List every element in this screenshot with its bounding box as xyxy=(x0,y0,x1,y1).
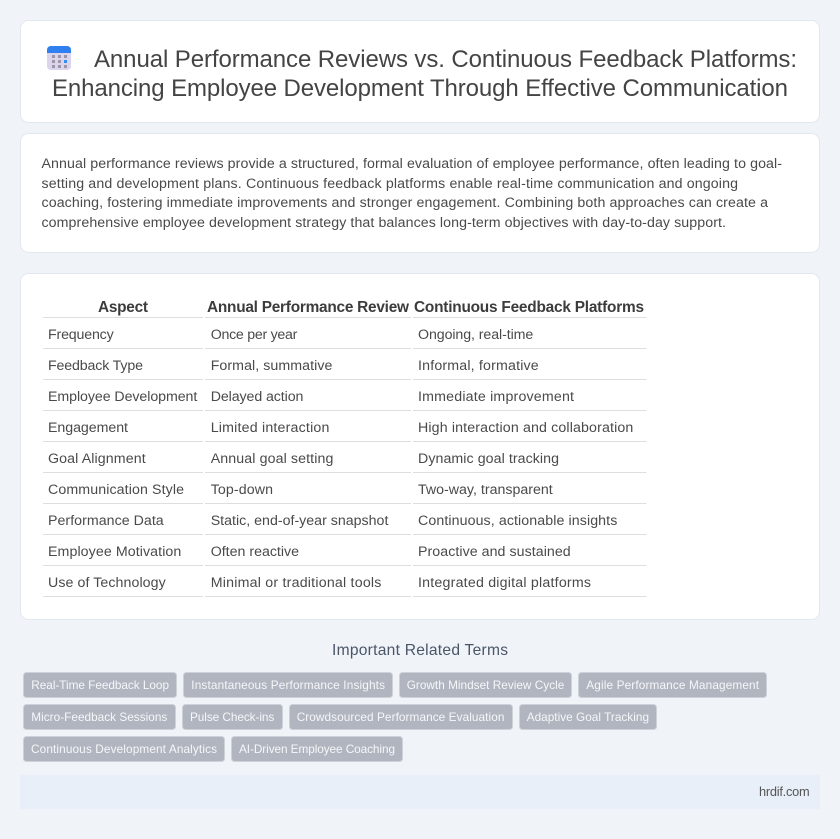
row: feedback type: Formal, summative xyxy=(211,358,333,374)
row: engagement: Engagement xyxy=(48,420,128,436)
row: employee development: Delayed action xyxy=(211,389,303,405)
tag xyxy=(232,736,402,762)
tag xyxy=(182,704,282,730)
tag xyxy=(24,736,224,762)
tag: Pulse Check-ins xyxy=(190,710,274,724)
row: goal alignment: Dynamic goal tracking xyxy=(418,451,559,467)
panel: comparison table xyxy=(20,274,820,620)
row: goal alignment: Goal Alignment xyxy=(48,451,146,467)
row: use of technology xyxy=(48,575,591,591)
row: performance data: Continuous, actionable insights xyxy=(418,513,617,529)
row: use of technology: Minimal or traditional tools xyxy=(211,575,381,591)
row: frequency: Once per year xyxy=(211,327,298,343)
tag: Micro-Feedback Sessions xyxy=(31,710,167,724)
row: feedback type xyxy=(48,358,539,374)
row: performance data: Static, end-of-year snapshot xyxy=(211,513,388,529)
row: engagement: Limited interaction xyxy=(211,420,329,436)
tag list xyxy=(24,672,766,762)
tag xyxy=(520,704,656,730)
row: employee development xyxy=(48,389,574,405)
tag: Instantaneous Performance Insights xyxy=(191,678,385,692)
row: goal alignment xyxy=(48,451,559,467)
tag: Continuous Development Analytics xyxy=(31,742,217,756)
row: employee motivation xyxy=(48,544,571,560)
row: employee development: Immediate improvement xyxy=(418,389,574,405)
row: communication style: Top-down xyxy=(211,482,273,498)
tag: AI-Driven Employee Coaching xyxy=(239,742,395,756)
tag: Agile Performance Management xyxy=(586,678,760,692)
tag xyxy=(578,672,766,698)
tag: Crowdsourced Performance Evaluation xyxy=(297,710,504,724)
tag xyxy=(24,672,176,698)
row: performance data xyxy=(48,513,617,529)
tag: Adaptive Goal Tracking xyxy=(527,710,649,724)
intro paragraph: comprehensive employee development strategy that balances long-term objectives with day-to-day support. xyxy=(42,215,726,231)
row: goal alignment: Annual goal setting xyxy=(211,451,333,467)
row: engagement xyxy=(48,420,633,436)
row: use of technology: Use of Technology xyxy=(48,575,167,591)
title: Annual Performance Reviews vs. Continuous Feedback Platforms: xyxy=(94,46,797,73)
intro paragraph xyxy=(42,156,782,231)
tag xyxy=(400,672,572,698)
title xyxy=(52,46,797,102)
row: frequency xyxy=(48,327,533,343)
row: employee motivation: Often reactive xyxy=(211,544,299,560)
row: communication style xyxy=(48,482,553,498)
table header: Continuous Feedback Platforms xyxy=(414,299,644,316)
row: use of technology: Integrated digital platforms xyxy=(418,575,591,591)
intro paragraph: setting and development plans. Continuous feedback platforms enable real-time communication and ongoing xyxy=(42,176,738,192)
tag: Growth Mindset Review Cycle xyxy=(407,678,565,692)
intro paragraph: coaching, fostering immediate improvements and stronger engagement. Combining both approaches can create a xyxy=(42,195,768,211)
heading: important related terms: Important Related Terms xyxy=(332,642,508,659)
footer source text: hrdif.com xyxy=(759,784,810,799)
row: communication style: Communication Style xyxy=(48,482,184,498)
icon: calendar xyxy=(47,46,71,70)
panel: introduction xyxy=(20,134,820,252)
row: employee motivation: Employee Motivation xyxy=(48,544,181,560)
row: frequency: Frequency xyxy=(48,327,115,343)
row: feedback type: Feedback Type xyxy=(48,358,143,374)
row: frequency: Ongoing, real-time xyxy=(418,327,533,343)
title: Enhancing Employee Development Through Effective Communication xyxy=(52,75,788,102)
row: communication style: Two-way, transparent xyxy=(418,482,553,498)
table header xyxy=(98,299,644,316)
tag xyxy=(184,672,392,698)
intro paragraph: Annual performance reviews provide a structured, formal evaluation of employee performance, often leading to goal- xyxy=(42,156,782,172)
tag xyxy=(290,704,512,730)
row: employee motivation: Proactive and sustained xyxy=(418,544,571,560)
table header: Aspect xyxy=(98,299,148,316)
table header: Annual Performance Review xyxy=(207,299,409,316)
row: feedback type: Informal, formative xyxy=(418,358,539,374)
panel: title card xyxy=(20,20,820,122)
row: engagement: High interaction and collaboration xyxy=(418,420,633,436)
tag xyxy=(24,704,176,730)
row: employee development: Employee Development xyxy=(48,389,197,405)
footer xyxy=(20,775,820,809)
tag: Real-Time Feedback Loop xyxy=(31,678,169,692)
row: performance data: Performance Data xyxy=(48,513,164,529)
